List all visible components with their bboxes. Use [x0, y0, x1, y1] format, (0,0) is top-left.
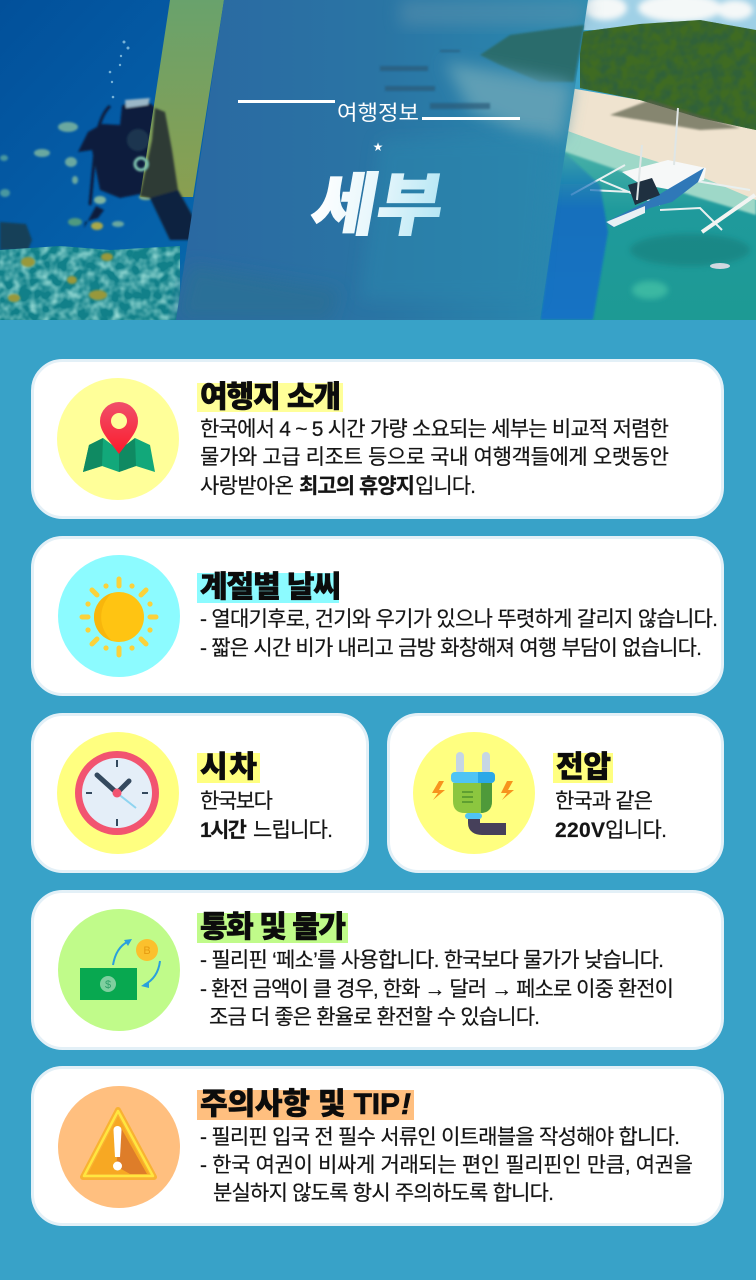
- body text: 1시간: [200, 819, 247, 842]
- photo: beach and outrigger boat: [540, 0, 756, 320]
- body text: - 짧은 시간 비가 내리고 금방 화창해져 여행 부담이 없습니다.: [200, 637, 702, 660]
- decorative line right: [422, 117, 520, 120]
- body text: 한국과 같은: [555, 790, 653, 813]
- body text: [200, 418, 669, 498]
- heading: 계절별 날씨: [200, 571, 341, 604]
- body text: 220V: [555, 819, 605, 842]
- heading: 시차: [200, 751, 257, 784]
- card background: [388, 714, 722, 872]
- card background: [32, 538, 722, 694]
- body text: 한국보다: [200, 790, 273, 813]
- star: ★: [373, 140, 383, 154]
- translucent title panel: [176, 0, 588, 320]
- diver silhouette: [77, 96, 154, 228]
- panel: destination intro: [32, 360, 722, 518]
- body text: - 필리핀 입국 전 필수 서류인 이트래블을 작성해야 합니다.: [200, 1126, 680, 1149]
- body text: - 열대기후로, 건기와 우기가 있으나 뚜렷하게 갈리지 않습니다.: [200, 608, 718, 631]
- panel: voltage: [388, 714, 722, 872]
- outrigger boat: [571, 108, 755, 232]
- icon: sun: [58, 555, 180, 677]
- heading: 통화 및 물가: [200, 911, 346, 944]
- body text: [200, 608, 718, 660]
- heading: !: [401, 1088, 411, 1121]
- fish decoration: [58, 122, 78, 132]
- body text: 입니다.: [605, 819, 667, 842]
- body text: - 필리핀 ‘페소’를 사용합니다. 한국보다 물가가 낮습니다.: [200, 949, 664, 972]
- main title: 세부: [305, 151, 453, 249]
- body text: 한국에서 4 ~ 5 시간 가량 소요되는 세부는 비교적 저렴한: [200, 418, 669, 441]
- heading: 주의사항 및 TIP: [200, 1088, 400, 1121]
- heading: 여행지 소개: [200, 381, 341, 414]
- card background: [32, 360, 722, 518]
- icon: money exchange: [58, 909, 180, 1031]
- card background: [32, 892, 722, 1048]
- icon: money exchange: $: [105, 979, 111, 991]
- card background: [32, 714, 368, 872]
- body text: 분실하지 않도록 항시 주의하도록 합니다.: [213, 1182, 554, 1205]
- body text: [200, 949, 674, 1029]
- icon: power plug: [413, 732, 535, 854]
- icon: map pin: [57, 378, 179, 500]
- body text: 느립니다.: [253, 819, 333, 842]
- photo: diver underwater: [0, 0, 224, 320]
- body text: 최고의 휴양지: [299, 475, 415, 498]
- body text: 조금 더 좋은 환율로 환전할 수 있습니다.: [209, 1006, 540, 1029]
- body text: [555, 790, 667, 842]
- body text: [200, 790, 333, 842]
- body text: 사랑받아온: [200, 475, 294, 498]
- icon: clock: [57, 732, 179, 854]
- section label: 여행정보: [337, 97, 419, 127]
- icon: money exchange: B: [143, 945, 151, 957]
- body text: - 한국 여권이 비싸게 거래되는 편인 필리핀인 만큼, 여권을: [200, 1154, 693, 1177]
- diver seen through band: [135, 108, 196, 240]
- panel: cautions and tips: [32, 1068, 722, 1224]
- body text: - 환전 금액이 클 경우, 한화 → 달러 → 페소로 이중 환전이: [200, 978, 674, 1001]
- body text: 물가와 고급 리조트 등으로 국내 여행객들에게 오랫동안: [200, 446, 669, 469]
- decorative line left: [238, 100, 335, 103]
- heading: 전압: [556, 751, 611, 784]
- body text: [200, 1126, 693, 1205]
- panel: currency and prices: [32, 892, 722, 1048]
- panel: time difference: [32, 714, 368, 872]
- blue diagonal band: [540, 150, 608, 320]
- body text: 입니다.: [415, 475, 476, 498]
- header photo banner: [0, 0, 756, 320]
- panel: seasonal weather: [32, 538, 722, 694]
- card background: [32, 1068, 722, 1224]
- icon: warning triangle: [58, 1086, 180, 1208]
- yellow-green diagonal band: [140, 0, 224, 197]
